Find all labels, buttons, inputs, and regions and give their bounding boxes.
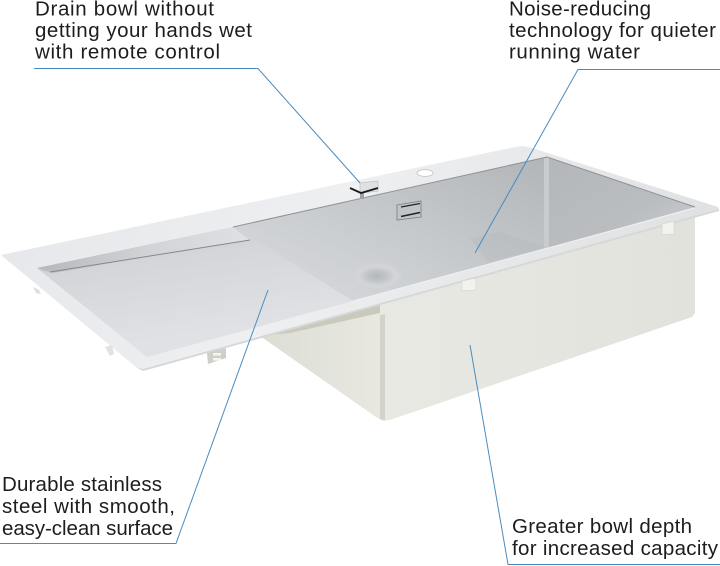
callout: durable steel bbox=[2, 473, 175, 540]
callout: durable steel: steel with smooth, bbox=[2, 495, 175, 518]
overflow bbox=[397, 201, 421, 220]
callout: drain bowl: getting your hands wet bbox=[35, 19, 252, 42]
deck front edge bbox=[136, 209, 719, 371]
callout: bowl depth: for increased capacity bbox=[512, 537, 719, 560]
sink basin exterior bbox=[260, 213, 695, 421]
mounting clips bbox=[33, 221, 674, 364]
callout: noise reducing bbox=[509, 0, 716, 64]
sink deck bbox=[1, 146, 719, 369]
callout: bowl depth bbox=[512, 515, 719, 560]
drainer area bbox=[37, 227, 353, 357]
remote control knob bbox=[350, 181, 378, 199]
callout: drain bowl: with remote control bbox=[34, 40, 220, 64]
callout: durable steel: easy-clean surface bbox=[2, 517, 173, 540]
tap hole bbox=[417, 170, 433, 176]
bowl drain bbox=[351, 262, 403, 290]
drainer back wedge bbox=[37, 227, 250, 273]
callout: bowl depth: Greater bowl depth bbox=[512, 515, 692, 538]
callout: durable steel: Durable stainless bbox=[2, 473, 162, 496]
callout: noise reducing: running water bbox=[509, 40, 640, 64]
callout: noise reducing: technology for quieter bbox=[509, 19, 716, 42]
stainless steel bowl bbox=[233, 157, 695, 301]
callout: drain bowl bbox=[34, 0, 252, 64]
